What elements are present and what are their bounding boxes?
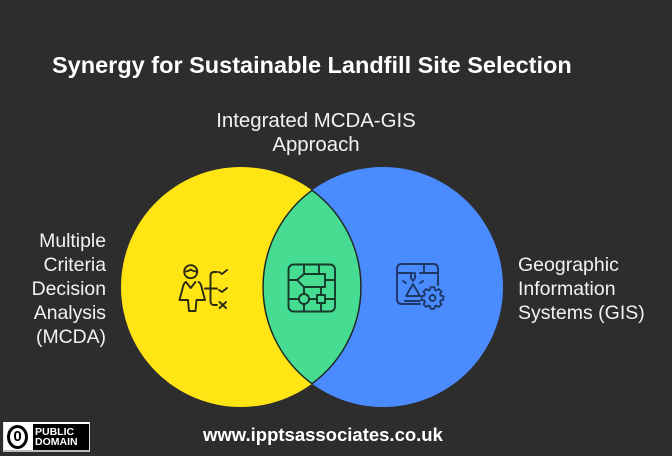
- label: GIS: Geographic: [518, 254, 619, 276]
- label: GIS: Systems (GIS): [518, 302, 645, 324]
- label: MCDA: Decision: [32, 278, 106, 300]
- badge icon: [4, 424, 33, 450]
- label: MCDA: [32, 230, 106, 348]
- badge text: DOMAIN: [35, 436, 78, 448]
- label: integrated approach: Approach: [272, 134, 360, 156]
- circle: GIS blue: [263, 167, 503, 407]
- icon: person with checklist: [180, 265, 227, 311]
- icon: circuit flowchart: [288, 264, 335, 312]
- label: integrated approach: [216, 110, 416, 156]
- badge text: PUBLIC: [35, 426, 74, 438]
- badge text: [35, 426, 78, 448]
- badge icon: 0: [13, 428, 22, 445]
- label: GIS: Information: [518, 278, 616, 300]
- label: MCDA: Analysis: [34, 302, 106, 324]
- lens: overlap: [263, 190, 361, 384]
- circle: MCDA yellow: [121, 167, 361, 407]
- label: MCDA: Multiple: [39, 230, 106, 252]
- icon: map with gear: [397, 264, 443, 309]
- label: MCDA: Criteria: [44, 254, 106, 276]
- badge: public domain: [3, 422, 90, 452]
- title: Synergy for Sustainable Landfill Site Selection: [52, 52, 572, 78]
- website footer: www.ipptsassociates.co.uk: [203, 424, 443, 445]
- label: GIS: [518, 254, 645, 324]
- label: MCDA: (MCDA): [36, 326, 106, 348]
- label: integrated approach: Integrated MCDA-GIS: [216, 110, 416, 132]
